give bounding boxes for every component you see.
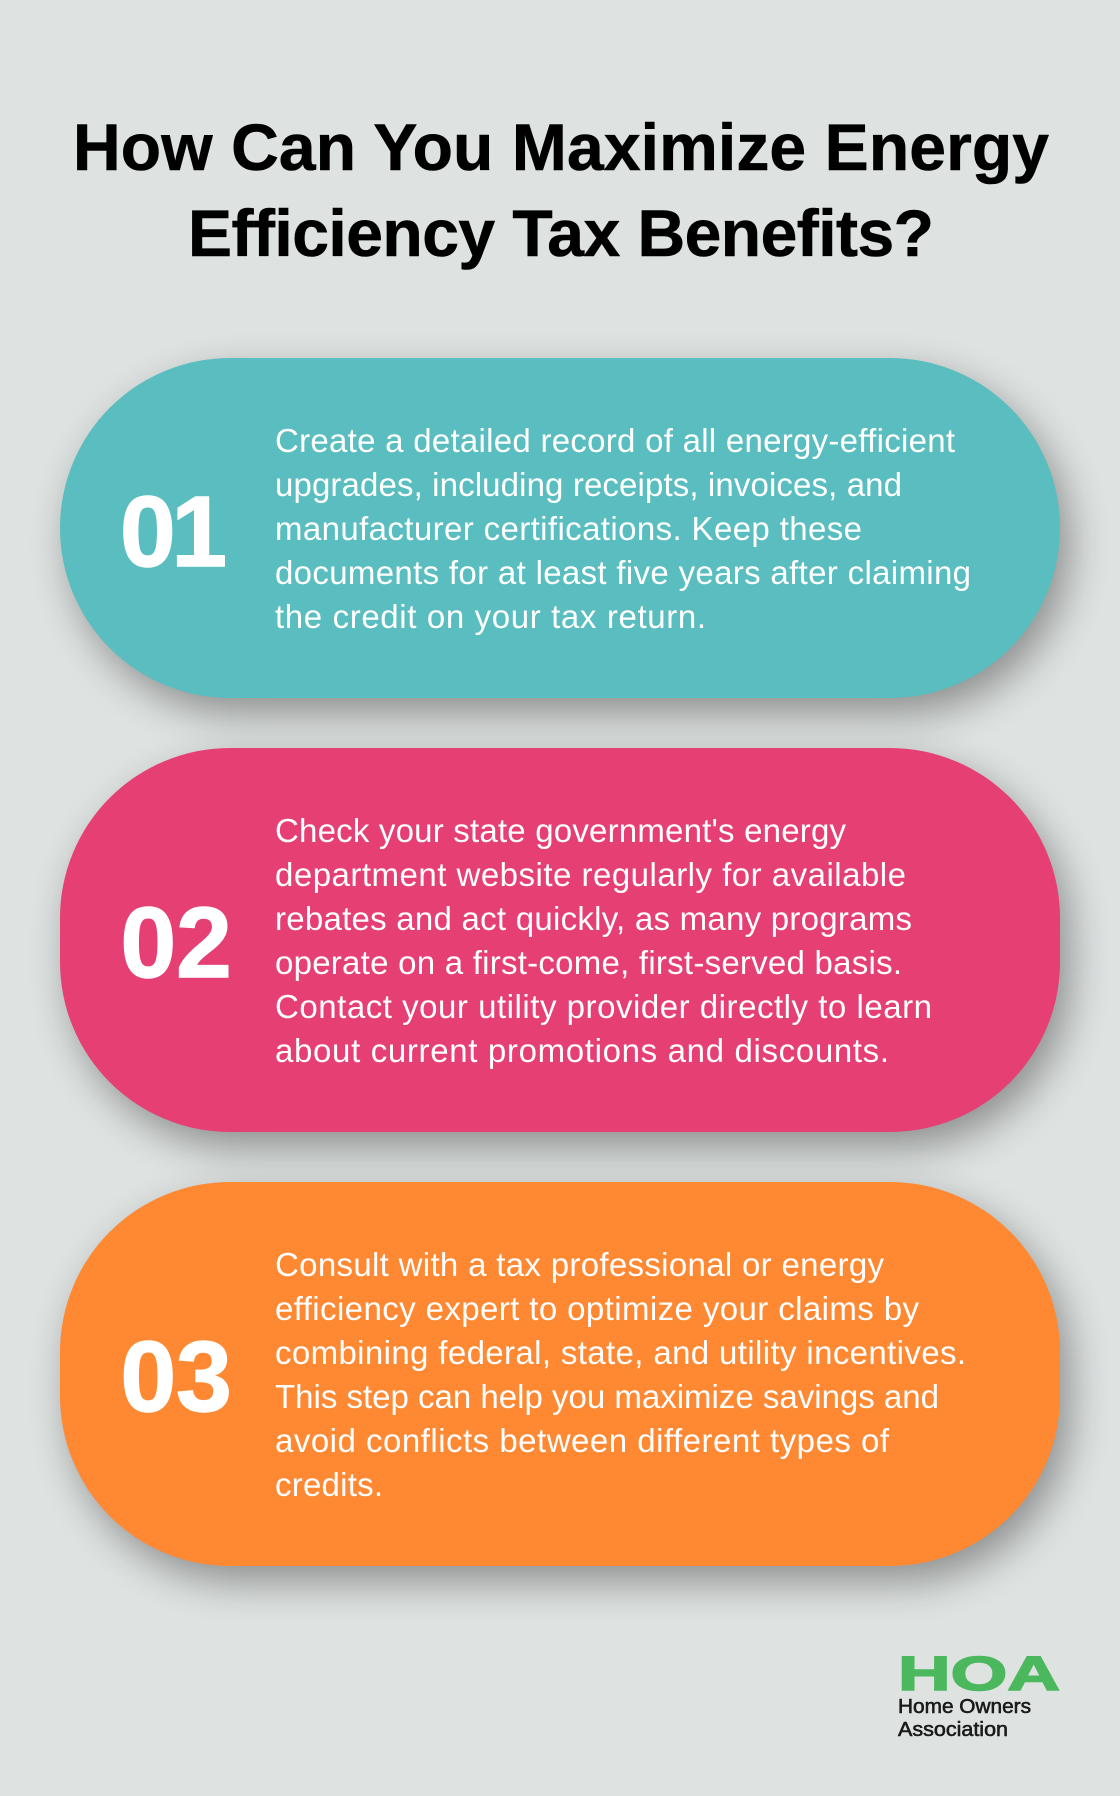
panel: step 03 [60,1182,1070,1582]
text block: step 02: Check your state government's energy [275,812,846,849]
text block: step 02: about current promotions and discounts. [275,1032,889,1069]
panel: step 02 [60,748,1070,1148]
text block: step 03: credits. [275,1466,383,1503]
text block: step 01: the credit on your tax return. [275,598,706,635]
text block: step 02 [275,812,932,1069]
text block: step 02: department website regularly for available [275,856,906,893]
logo: HOA: Association [898,1719,1008,1741]
panel: step 01 [60,358,1070,714]
text block: step 01: manufacturer certifications. Keep these [275,510,862,547]
text block: step 03 [275,1246,966,1503]
text block: step 02: rebates and act quickly, as many programs [275,900,912,937]
number 03: 03 [120,1321,232,1433]
text block: step 03: This step can help you maximize savings and [275,1378,939,1415]
text block: step 03: efficiency expert to optimize your claims by [275,1290,920,1327]
text block: step 03: Consult with a tax professional or energy [275,1246,884,1283]
text block: step 03: avoid conflicts between different types of [275,1422,890,1459]
number 01: 01 [120,476,227,588]
title: Efficiency Tax Benefits? [188,196,934,270]
text block: step 01: Create a detailed record of all energy-efficient [275,422,955,459]
logo: HOA [898,1648,1060,1741]
text block: step 01: upgrades, including receipts, invoices, and [275,466,902,503]
text block: step 02: Contact your utility provider directly to learn [275,988,932,1025]
text block: step 01 [275,422,971,635]
text block: step 02: operate on a first-come, first-served basis. [275,944,902,981]
text block: step 03: combining federal, state, and utility incentives. [275,1334,966,1371]
title [73,110,1049,270]
logo: HOA: HOA [898,1648,1060,1701]
logo: HOA: Home Owners [898,1696,1031,1718]
text block: step 01: documents for at least five years after claiming [275,554,971,591]
number 02: 02 [120,887,232,999]
title: How Can You Maximize Energy [73,110,1049,184]
